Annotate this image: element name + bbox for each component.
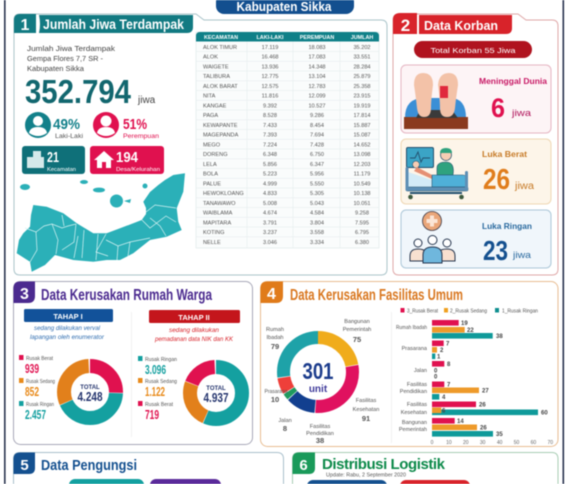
population table: 11.816 [262, 94, 278, 100]
population table: 18.083 [308, 45, 326, 51]
bars: Jalan: 8 [447, 362, 451, 368]
population table: 4.999 [263, 182, 277, 188]
table header: JUMLAH [351, 35, 373, 41]
population table: 8.528 [263, 113, 277, 119]
Tahap II legend: 1.122 [145, 385, 165, 399]
bars: Jalan: Jalan [414, 368, 427, 374]
blue stat pill [307, 480, 387, 484]
card: Luka Ringan: jiwa [512, 250, 532, 261]
population table: LELA [203, 162, 217, 168]
population table: 7.224 [263, 142, 277, 148]
population table: WAIBLAMA [203, 211, 233, 217]
donut labels: Prasarana [264, 389, 288, 395]
population table: 15.887 [353, 123, 371, 129]
bars: Jalan [414, 361, 451, 380]
bars: Fasilitas Kesehatan [401, 402, 548, 416]
population table: PALUE [203, 182, 221, 188]
female share: Perempuan [123, 133, 159, 140]
Tahap II heading: pemadanan data NIK dan KK [154, 337, 234, 343]
population table: 5.008 [263, 201, 277, 207]
bars: Fasilitas Pendidikan: 4 [442, 395, 446, 401]
total population number: 352.794 [25, 73, 132, 110]
kecamatan stat: 21 [47, 150, 59, 166]
bars: Prasarana: 7 [446, 342, 450, 348]
population table: 28.284 [353, 64, 371, 70]
panel 4: Data Kerusakan Fasilitas Umum [260, 282, 558, 446]
population table: 12.783 [308, 84, 326, 90]
panel 1 heading [14, 14, 193, 34]
population table: 5.956 [310, 172, 324, 178]
total population number: jiwa [137, 95, 156, 106]
card: Luka Berat [401, 139, 551, 204]
bars: Bangunan Pemerintah: Bangunan [402, 420, 427, 426]
population table: 7.595 [355, 220, 369, 226]
panel 5 heading: 5 [20, 457, 29, 474]
bar chart axis: 10 [446, 440, 452, 446]
population table: 9.392 [263, 104, 277, 110]
bars: Jalan: 0 [434, 368, 438, 374]
panel 5 heading: Data Pengungsi [41, 457, 137, 474]
population table: NITA [203, 94, 216, 100]
bars: Fasilitas Kesehatan: Kesehatan [401, 410, 427, 416]
intro text: Kabupaten Sikka [27, 66, 84, 73]
population table: DORENG [203, 152, 228, 158]
population table: 6.347 [310, 162, 324, 168]
population table: 4.674 [263, 211, 277, 217]
panel 3: Data Kerusakan Rumah Warga [14, 282, 252, 444]
donut labels: 79 [271, 342, 279, 351]
population table: 13.936 [261, 64, 279, 70]
population table: 5.223 [263, 172, 277, 178]
population table: 15.087 [353, 133, 371, 139]
donut labels: Pendidikan [306, 431, 334, 437]
Tahap II heading: TAHAP II [178, 313, 210, 322]
horizontal bar chart [396, 320, 553, 446]
kecamatan stat [22, 146, 85, 174]
population table: KOTING [203, 230, 224, 236]
population table: 3.804 [310, 220, 324, 226]
bars: Rumah Ibadah: 19 [461, 321, 468, 327]
bars: Prasarana: Prasarana [402, 346, 428, 352]
population table: 3.558 [310, 230, 324, 236]
bars: Bangunan Pemerintah: 26 [480, 426, 487, 432]
female share [93, 112, 159, 140]
population table: WAIGETE [203, 64, 229, 70]
population table: 5.305 [310, 191, 324, 197]
population table: 7.428 [310, 142, 324, 148]
bar chart axis: 30 [480, 440, 486, 446]
desa/kelurahan stat [90, 146, 164, 174]
bar chart legend: 1_Rusak Ringan [502, 308, 538, 314]
Tahap I donut chart: TOTAL [80, 385, 100, 391]
intro text [27, 46, 116, 73]
Tahap I donut chart [64, 366, 116, 418]
bar chart legend: 2_Rusak Sedang [450, 308, 487, 314]
population table: MAGEPANDA [203, 133, 239, 139]
icon: patient in hospital bed [406, 148, 468, 199]
population table: 6.795 [355, 230, 369, 236]
bar chart axis: 60 [531, 440, 536, 446]
population table: 10.138 [353, 191, 371, 197]
Tahap I legend: 852 [25, 385, 39, 399]
population table: ALOK BARAT [203, 84, 238, 90]
population table: 16.468 [261, 55, 279, 61]
female share: 51% [123, 116, 147, 133]
population table [196, 32, 379, 248]
bars: Rumah Ibadah: 38 [496, 334, 503, 340]
population table: 17.814 [353, 113, 371, 119]
population table: 17.083 [308, 55, 326, 61]
bars: Fasilitas Pendidikan: Pendidikan [400, 389, 427, 395]
bars: Prasarana: 2 [440, 348, 444, 354]
intro text: Jumlah Jiwa Terdampak [27, 46, 116, 53]
red stat pill [400, 480, 470, 484]
population table: 35.202 [353, 45, 371, 51]
panel 3 heading [14, 282, 212, 304]
population table: 4.833 [263, 191, 277, 197]
population table: 5.043 [310, 201, 324, 207]
card: Meninggal Dunia: jiwa [511, 108, 532, 119]
population table: 19.919 [353, 104, 371, 110]
population table: 13.104 [308, 74, 326, 80]
title banner: Kabupaten Sikka: Kabupaten Sikka [236, 0, 332, 14]
population table: 3.334 [310, 240, 324, 246]
donut labels: Fasilitas [356, 398, 376, 404]
population table: 9.286 [310, 113, 324, 119]
map of Kabupaten Sikka [17, 173, 185, 272]
Tahap II donut chart: TOTAL [206, 386, 226, 392]
panel 4 heading: Data Kerusakan Fasilitas Umum [290, 287, 463, 304]
bars: Bangunan Pemerintah: Pemerintah [399, 427, 427, 433]
Tahap I legend: Rusak Berat [26, 356, 53, 362]
bar chart axis: 70 [548, 440, 553, 446]
donut labels [264, 319, 379, 445]
population table: KANGAE [203, 104, 227, 110]
population table: 12.775 [261, 74, 279, 80]
donut labels: Rumah [266, 327, 284, 333]
table header: PEREMPUAN [300, 35, 334, 41]
card: Meninggal Dunia [401, 65, 551, 133]
bars: Fasilitas Kesehatan: 60 [541, 410, 548, 416]
facilities donut chart: unit [309, 384, 328, 395]
table header: LAKI-LAKI [257, 35, 284, 41]
population table: 5.856 [263, 162, 277, 168]
bars: Fasilitas Pendidikan: 7 [447, 382, 451, 388]
population table: MEGO [203, 142, 221, 148]
intro text: Gempa Flores 7,7 SR - [27, 56, 104, 63]
bars: Bangunan Pemerintah [399, 418, 503, 438]
population table: 11.179 [354, 172, 370, 178]
bar chart axis: 0 [431, 440, 434, 446]
Tahap I legend: 2.457 [25, 408, 46, 422]
panel 4 heading: 4 [267, 286, 276, 303]
male share: 49% [53, 116, 80, 133]
donut labels: 91 [362, 414, 370, 423]
donut labels: 75 [353, 335, 361, 344]
table header [196, 32, 379, 42]
facilities donut chart [284, 338, 352, 406]
card: Meninggal Dunia: Meninggal Dunia [479, 76, 547, 86]
population table: 10.051 [353, 201, 371, 207]
population table: 4.584 [310, 211, 324, 217]
desa/kelurahan stat: 194 [116, 150, 138, 166]
panel 6 heading: 6 [299, 457, 308, 474]
Tahap II heading: sedang dilakukan [169, 328, 220, 334]
donut labels: Kesehatan [353, 407, 379, 413]
bars: Prasarana: 1 [437, 354, 441, 360]
panel 6: Distribusi Logistik [292, 452, 558, 484]
population table: 6.380 [355, 240, 369, 246]
bar chart axis: 40 [497, 440, 503, 446]
population table: TANAWAWO [203, 201, 236, 207]
population table: 25.879 [353, 74, 371, 80]
donut labels: 10 [271, 395, 279, 404]
Tahap II legend [138, 356, 177, 422]
male share: Laki-Laki [55, 133, 83, 140]
panel 2 heading: 2 [401, 16, 410, 35]
kecamatan stat: Kecamatan [47, 167, 76, 173]
population table: 10.549 [353, 182, 371, 188]
Tahap II legend: Rusak Sedang [145, 379, 177, 385]
panel 1 heading: 1 [21, 17, 30, 34]
donut labels: Pemerintah [343, 327, 371, 333]
Tahap II heading [149, 310, 240, 343]
icon: injured group with medical cross [410, 212, 455, 263]
panel 2: Data Korban [393, 13, 558, 275]
population table: 12.203 [353, 162, 371, 168]
population table: NELLE [203, 240, 221, 246]
bar chart axis [431, 440, 553, 446]
bars: Fasilitas Pendidikan: 27 [482, 388, 489, 394]
Tahap I heading: TAHAP I [53, 312, 83, 321]
Tahap I legend: 939 [25, 362, 39, 376]
population table: PAGA [203, 113, 218, 119]
donut labels: Jalan [278, 418, 292, 424]
population table: 33.551 [353, 55, 371, 61]
donut labels: Fasilitas [310, 424, 330, 430]
purple stat pill [150, 479, 221, 484]
bars: Prasarana [402, 340, 450, 360]
card: Luka Ringan: 23 [483, 235, 508, 266]
bar chart legend: 3_Rusak Berat [407, 308, 438, 314]
Tahap II legend: 719 [145, 408, 159, 422]
population table: 8.454 [310, 123, 324, 129]
bars: Fasilitas Kesehatan: 6 [442, 408, 446, 414]
population table: 13.098 [353, 152, 371, 158]
icon: feet with toe tag [404, 73, 468, 129]
card: Luka Ringan: Luka Ringan [482, 221, 532, 231]
Tahap I heading [24, 309, 113, 341]
population table: 10.527 [308, 104, 326, 110]
bars: Jalan: 0 [434, 374, 438, 380]
card: Luka Ringan [401, 210, 551, 268]
bars: Rumah Ibadah: Rumah Ibadah [396, 325, 427, 331]
population table: 6.348 [263, 152, 277, 158]
panel 4 heading [260, 282, 463, 304]
teal stat pill [69, 479, 144, 484]
panel 2 heading [393, 13, 512, 35]
bars: Bangunan Pemerintah: 14 [457, 419, 464, 425]
population table: ALOK TIMUR [203, 45, 237, 51]
bar chart legend [400, 308, 538, 314]
Tahap II legend: Rusak Berat [145, 402, 173, 408]
Tahap I legend: Rusak Ringan [26, 402, 54, 408]
population table: 3.791 [263, 220, 277, 226]
population table: TALIBURA [203, 74, 230, 80]
population table: 3.046 [263, 240, 277, 246]
population table: 9.258 [355, 211, 369, 217]
population table: BOLA [203, 172, 218, 178]
panel 1 heading: Jumlah Jiwa Terdampak [43, 17, 184, 32]
bars: Fasilitas Kesehatan: 26 [479, 402, 486, 408]
population table: 7.393 [263, 133, 277, 139]
donut labels: 8 [283, 424, 287, 433]
panel 5 heading [14, 452, 137, 474]
population table: 23.915 [353, 94, 371, 100]
bars: Fasilitas Pendidikan [400, 382, 489, 401]
Tahap II donut chart [190, 367, 242, 419]
desa/kelurahan stat: Desa/Kelurahan [116, 167, 160, 173]
population table: 14.652 [353, 142, 371, 148]
donut labels: 38 [316, 436, 324, 445]
panel 2 heading: Data Korban [424, 18, 498, 33]
population table: KEWAPANTE [203, 123, 238, 129]
Tahap I legend [19, 355, 55, 422]
male share [25, 112, 83, 140]
bar chart axis: 50 [514, 440, 519, 446]
panel 3 heading: 3 [20, 286, 29, 303]
population table: MAPITARA [203, 220, 231, 226]
card: Meninggal Dunia: 6 [491, 93, 505, 123]
card: Luka Berat: jiwa [514, 181, 534, 192]
panel 6 heading: Distribusi Logistik [322, 456, 446, 473]
panel 1: Jumlah Jiwa Terdampak [14, 14, 387, 275]
total victims pill: Total Korban 55 Jiwa [430, 46, 517, 55]
Tahap I legend: Rusak Sedang [26, 379, 55, 385]
Tahap I donut chart: 4.248 [78, 390, 103, 404]
table header: KECAMATAN [204, 35, 238, 41]
Tahap I heading: sedang dilakukan verval [34, 326, 101, 332]
facilities donut chart: 301 [302, 358, 334, 384]
card: Luka Berat: Luka Berat [482, 149, 527, 159]
population table: HEWOKLOANG [203, 191, 244, 197]
panel 3 heading: Data Kerusakan Rumah Warga [41, 287, 212, 304]
Tahap II donut chart: 4.937 [204, 391, 229, 405]
panel 6 heading [292, 452, 446, 478]
population table: 14.348 [308, 64, 326, 70]
card: Luka Berat: 26 [483, 164, 510, 196]
bars: Bangunan Pemerintah: 35 [496, 432, 503, 438]
panel 6 heading: Update: Rabu, 2 September 2020 [326, 472, 406, 478]
population table: ALOK [203, 55, 218, 61]
bars: Rumah Ibadah [396, 320, 503, 340]
population table: 12.575 [261, 84, 279, 90]
Tahap I heading: lapangan oleh enumerator [30, 335, 105, 341]
bars: Rumah Ibadah: 22 [467, 328, 474, 334]
total victims pill [414, 41, 532, 58]
population table: 5.550 [310, 182, 324, 188]
population table: 17.119 [262, 45, 278, 51]
donut labels: Ibadah [266, 335, 284, 341]
Tahap II legend: 3.096 [145, 363, 166, 377]
population table: 7.433 [263, 123, 277, 129]
bars: Fasilitas Kesehatan: Fasilitas [407, 402, 427, 408]
population table: 3.237 [263, 230, 277, 236]
population table: 7.694 [310, 133, 324, 139]
panel 5: Data Pengungsi [14, 452, 284, 484]
donut labels: Bangunan [344, 319, 370, 325]
population table: 25.358 [353, 84, 371, 90]
bar chart axis: 20 [463, 440, 469, 446]
bars: Fasilitas Pendidikan: Fasilitas [407, 382, 427, 388]
population table: 6.750 [310, 152, 324, 158]
Tahap II legend: Rusak Ringan [145, 357, 177, 363]
population table: 12.099 [308, 94, 326, 100]
